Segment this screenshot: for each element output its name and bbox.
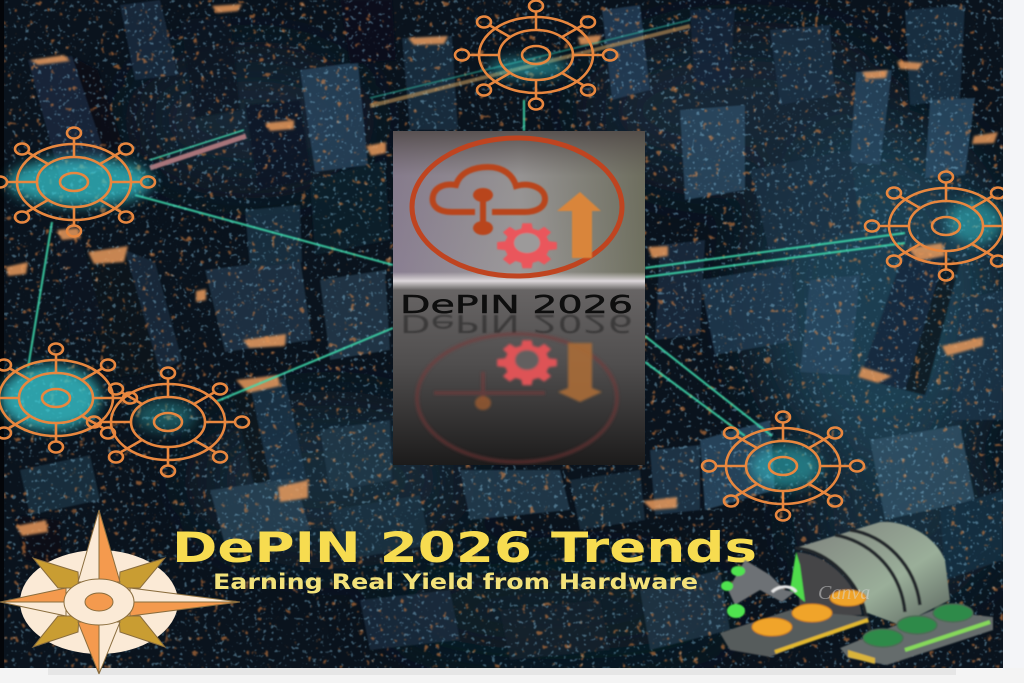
network node: right (865, 172, 1024, 280)
tunnel opening (797, 552, 862, 618)
title: DePIN 2026 Trends (172, 523, 757, 572)
mining machine illustration (720, 522, 993, 665)
growth arrow (557, 192, 601, 258)
panel label: DePIN 2026 (400, 290, 633, 319)
logo ring (412, 138, 622, 276)
watermark: Canva (818, 582, 870, 604)
network connection lines (28, 100, 905, 436)
node glows (0, 58, 1003, 489)
lit rooftops (6, 4, 998, 536)
mirrored logo reflection (417, 334, 617, 462)
green indicator lights (721, 566, 745, 618)
gear icon (497, 223, 557, 268)
central logo panel (393, 131, 645, 465)
left conveyor platform (720, 610, 870, 657)
network node: lower left (0, 344, 137, 452)
cloud icon (433, 167, 545, 235)
bottom page margin (0, 668, 1024, 683)
light trails (150, 20, 690, 168)
subtitle: Earning Real Yield from Hardware (213, 570, 698, 594)
compass rose icon (0, 510, 240, 674)
gold coins (752, 590, 866, 636)
network node: upper left (0, 128, 155, 236)
tunnel housing (795, 522, 950, 625)
network node: lower right (702, 412, 864, 520)
network node: top (455, 0, 617, 110)
mirrored label reflection: DePIN 2026 (400, 309, 633, 338)
robot arm (728, 560, 795, 605)
right conveyor platform (840, 610, 993, 665)
background colour washes (140, 40, 1000, 650)
network node: lower middle left (87, 368, 249, 476)
green coins (863, 604, 973, 647)
left black edge (0, 0, 4, 668)
